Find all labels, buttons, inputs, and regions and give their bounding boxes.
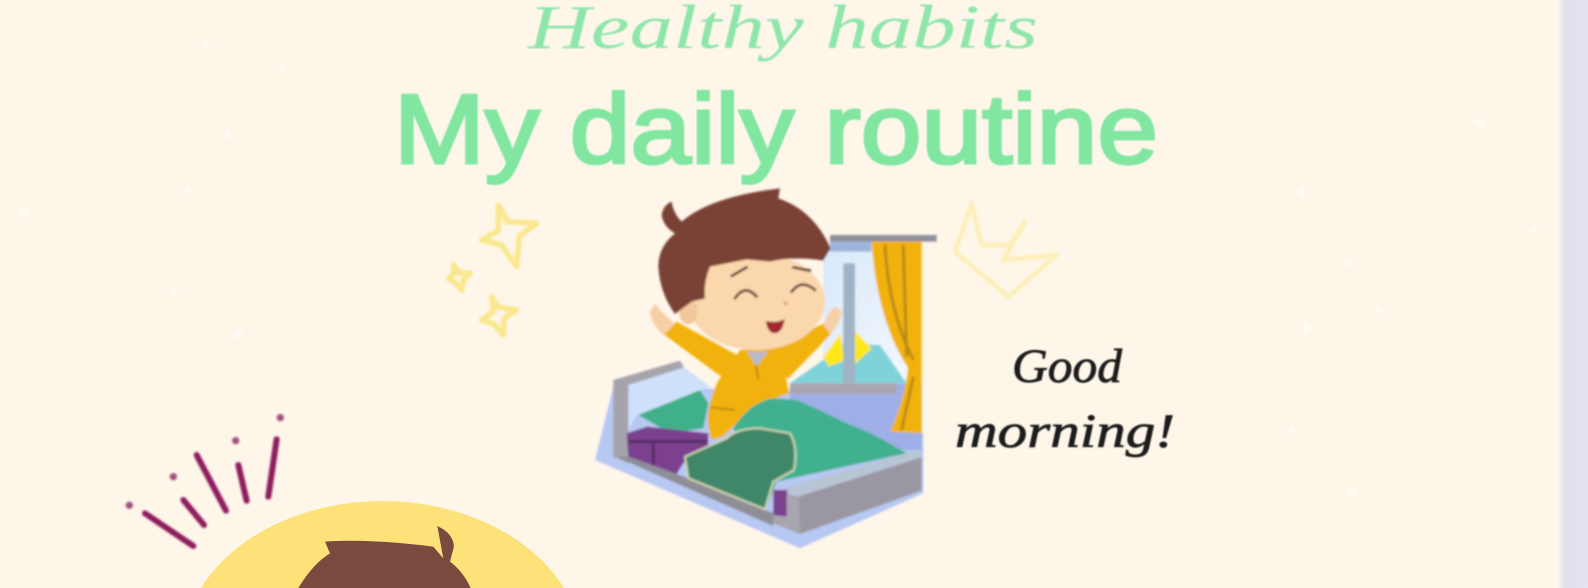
bed frame side bbox=[616, 457, 773, 526]
hands bbox=[650, 303, 843, 335]
floor shadow bbox=[595, 387, 923, 548]
icon: crown doodle bbox=[955, 203, 1057, 297]
face details bbox=[732, 267, 815, 333]
window bbox=[790, 235, 937, 394]
greeting: Good morning!: Good bbox=[1012, 340, 1123, 393]
title: My daily routine: My daily routine bbox=[394, 74, 1158, 184]
pillow bbox=[638, 390, 708, 433]
hair bbox=[658, 188, 831, 314]
greeting: Good morning! bbox=[955, 340, 1175, 458]
mattress bbox=[627, 427, 708, 474]
wall under window bbox=[790, 383, 922, 450]
yellow circle behind second character bbox=[201, 501, 564, 588]
ear bbox=[679, 299, 698, 324]
curtain bbox=[872, 242, 922, 433]
second character hair bbox=[298, 526, 471, 588]
right edge strip bbox=[1558, 0, 1588, 588]
illustration: boy waking up in bed bbox=[595, 188, 937, 548]
footboard bbox=[772, 450, 922, 534]
icon: sparkle stars bbox=[448, 205, 537, 335]
head bbox=[688, 253, 825, 350]
blanket bbox=[685, 398, 907, 509]
icon: burst ticks bbox=[126, 414, 284, 546]
greeting: Good morning!: morning! bbox=[955, 405, 1175, 458]
boy pajama body bbox=[663, 322, 832, 440]
headboard bbox=[613, 361, 710, 463]
